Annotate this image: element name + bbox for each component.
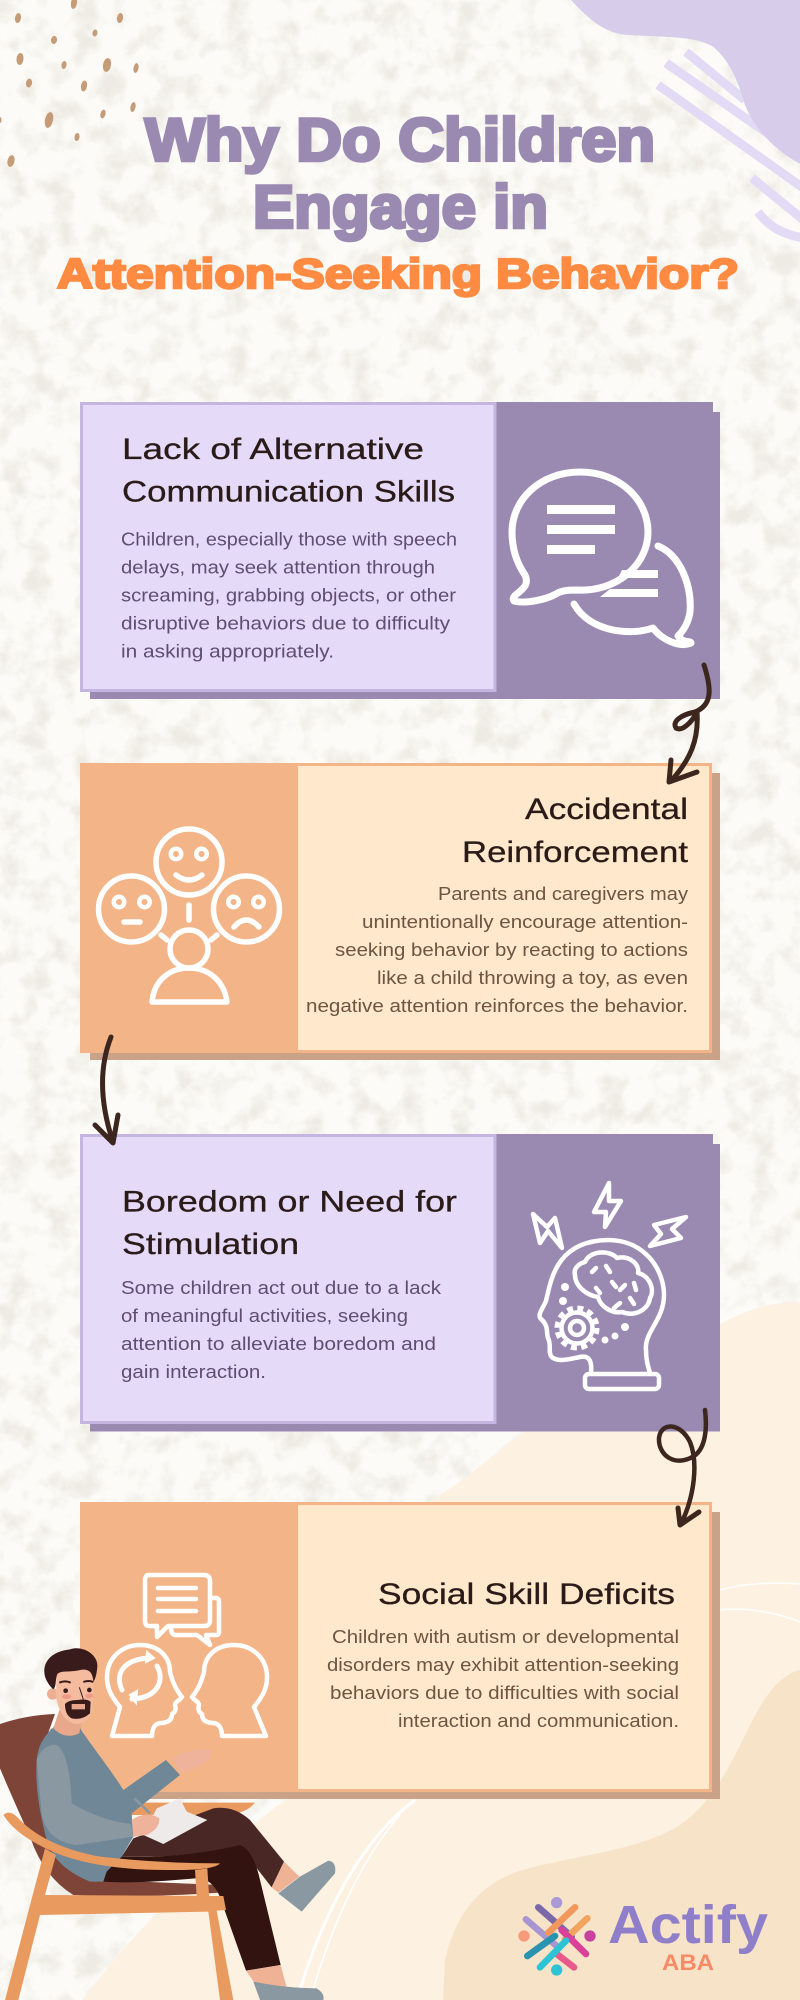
- body text: boredom or need for stimulation: gain interaction.: [121, 1362, 266, 1382]
- icon: head with brain and lightning: [533, 1183, 686, 1389]
- purple blob top right: [571, 0, 800, 164]
- open notebook: [143, 1798, 207, 1844]
- body text: boredom or need for stimulation: of meaningful activities, seeking: [121, 1306, 408, 1326]
- decorative dots top left: [0, 0, 139, 168]
- background: tan blob: [443, 1670, 800, 2000]
- panel: social skill deficits: [80, 0, 720, 1799]
- title: Attention-Seeking Behavior?: [57, 250, 739, 297]
- icon: speech bubbles: [512, 472, 691, 645]
- body text: accidental reinforcement: unintentionally encourage attention-: [362, 912, 688, 932]
- illustration: man seated in chair writing: [0, 1648, 335, 2000]
- heading: accidental reinforcement: Accidental: [525, 793, 688, 826]
- title: Engage in: [253, 174, 548, 240]
- body text: lack of alternative communication skills: screaming, grabbing objects, or other: [121, 586, 456, 606]
- heading: lack of alternative communication skills: [122, 433, 455, 508]
- heading: lack of alternative communication skills: Communication Skills: [122, 476, 455, 508]
- body text: boredom or need for stimulation: attention to alleviate boredom and: [121, 1334, 436, 1354]
- title: [57, 106, 739, 297]
- icon: faces and person: [98, 829, 280, 1002]
- title: Why Do Children: [145, 106, 655, 174]
- icon: two heads talking: [107, 0, 374, 1736]
- body text: accidental reinforcement: seeking behavior by reacting to actions: [335, 940, 688, 960]
- body text: lack of alternative communication skills: [121, 530, 457, 662]
- body text: social skill deficits: interaction and communication.: [398, 1711, 679, 1731]
- heading: accidental reinforcement: Reinforcement: [462, 836, 689, 869]
- body text: accidental reinforcement: [306, 884, 688, 1016]
- raised hand: [173, 1749, 211, 1773]
- body text: social skill deficits: [327, 1627, 679, 1731]
- logo wordmark: Actify: [608, 1895, 768, 1955]
- body text: lack of alternative communication skills: Children, especially those with speech: [121, 530, 457, 550]
- body text: accidental reinforcement: negative attention reinforces the behavior.: [306, 996, 688, 1016]
- heading: boredom or need for stimulation: Boredom or Need for: [122, 1186, 457, 1218]
- body text: boredom or need for stimulation: [121, 1278, 442, 1382]
- logo mark: [518, 1897, 596, 1976]
- body text: lack of alternative communication skills: disruptive behaviors due to difficulty: [121, 614, 450, 634]
- heading: boredom or need for stimulation: [122, 1186, 457, 1261]
- heading: social skill deficits: Social Skill Deficits: [378, 1578, 675, 1611]
- body text: boredom or need for stimulation: Some children act out due to a lack: [121, 1278, 442, 1298]
- heading: boredom or need for stimulation: Stimulation: [122, 1228, 299, 1261]
- body text: accidental reinforcement: like a child throwing a toy, as even: [377, 968, 688, 988]
- arrow: card one to card two: [669, 665, 709, 782]
- panel: accidental reinforcement: [80, 763, 720, 1060]
- body text: social skill deficits: Children with autism or developmental: [332, 1627, 679, 1647]
- background: thin white curves: [297, 1583, 800, 2000]
- chair back: [0, 1714, 220, 1896]
- panel: lack of alternative communication skills: [82, 402, 720, 699]
- decorative stripes top right: [658, 52, 800, 238]
- body text: lack of alternative communication skills: delays, may seek attention through: [121, 558, 435, 578]
- body text: social skill deficits: behaviors due to difficulties with social: [330, 1683, 679, 1703]
- logo: Actify ABA: ABA: [662, 1950, 714, 1975]
- logo: Actify ABA: [518, 1895, 768, 1976]
- writing hand and pen: [132, 1798, 159, 1837]
- panel: boredom or need for stimulation: [82, 1134, 720, 1432]
- heading: lack of alternative communication skills: Lack of Alternative: [122, 433, 424, 466]
- chair armrest tray: [111, 1803, 255, 1815]
- heading: accidental reinforcement: [462, 793, 689, 869]
- body text: accidental reinforcement: Parents and caregivers may: [438, 884, 688, 904]
- body text: lack of alternative communication skills: in asking appropriately.: [121, 642, 334, 662]
- head: [44, 1648, 97, 1736]
- background: cream blob: [82, 1303, 800, 2000]
- sweater: [36, 1722, 180, 1882]
- legs: [103, 1808, 335, 2000]
- body text: social skill deficits: disorders may exhibit attention-seeking: [327, 1655, 679, 1675]
- arrow: card two to card three: [95, 1037, 118, 1143]
- chair frame: [3, 1813, 220, 1870]
- arrow: card three to card four: [659, 1410, 706, 1525]
